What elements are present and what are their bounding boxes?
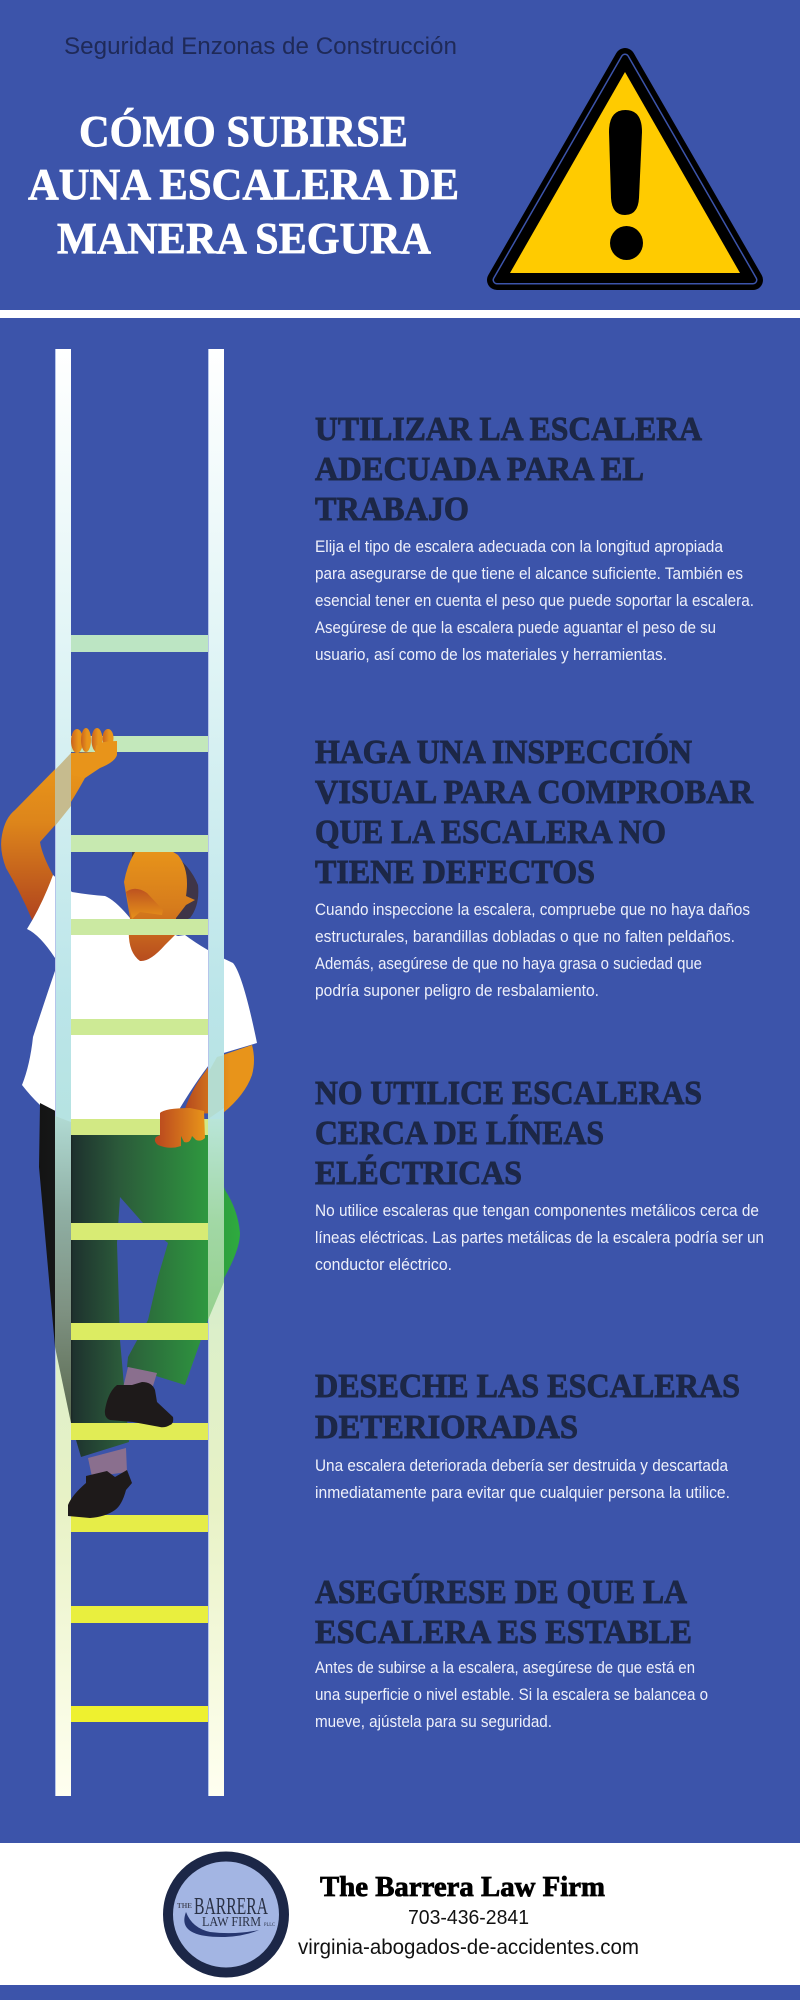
hair — [130, 852, 198, 925]
socks — [88, 1367, 157, 1477]
body text: Cuando inspeccione la escalera, compruebe que no haya daños — [315, 901, 750, 919]
heading: CERCA DE LÍNEAS — [315, 1115, 604, 1152]
heading: DESECHE LAS ESCALERAS — [315, 1368, 740, 1405]
body text: Una escalera deteriorada debería ser destruida y descartada — [315, 1457, 729, 1475]
section 1: right ladder — [315, 411, 754, 664]
heading — [315, 733, 753, 891]
heading: ADECUADA PARA EL — [315, 451, 644, 488]
heading: UTILIZAR LA ESCALERA — [315, 411, 702, 448]
heading: DETERIORADAS — [315, 1409, 578, 1446]
logo: BARRERA — [194, 1894, 268, 1920]
body text: mueve, ajústela para su seguridad. — [315, 1713, 552, 1731]
rungs — [71, 635, 208, 652]
body text: inmediatamente para evitar que cualquier persona la utilice. — [315, 1484, 730, 1502]
section 2: visual inspection — [315, 733, 753, 1000]
heading — [315, 1368, 740, 1446]
heading: TRABAJO — [315, 491, 469, 528]
ladder — [55, 349, 224, 1796]
icon: fist gripping rung — [71, 728, 117, 778]
body text: esencial tener en cuenta el peso que puede soportar la escalera. — [315, 592, 754, 610]
section 5: stable ladder — [315, 1573, 708, 1731]
body text: podría suponer peligro de resbalamiento. — [315, 982, 599, 1000]
body text: líneas eléctricas. Las partes metálicas de la escalera podría ser un — [315, 1229, 764, 1247]
heading: QUE LA ESCALERA NO — [315, 814, 666, 851]
title: AUNA ESCALERA DE — [28, 160, 459, 209]
arm seen through rail — [55, 753, 71, 826]
heading — [315, 1573, 692, 1651]
body text: estructurales, barandillas dobladas o que no falten peldaños. — [315, 928, 735, 946]
heading: NO UTILICE ESCALERAS — [315, 1075, 702, 1112]
body text — [315, 538, 754, 664]
logo: PLLC — [264, 1923, 276, 1928]
title: CÓMO SUBIRSE — [79, 107, 408, 156]
heading: HAGA UNA INSPECCIÓN — [315, 733, 692, 771]
leg seen through left rail — [55, 1116, 71, 1423]
body text: usuario, así como de los materiales y herramientas. — [315, 646, 667, 664]
body text: Asegúrese de que la escalera puede aguantar el peso de su — [315, 619, 716, 637]
section 4: discard damaged ladders — [315, 1368, 740, 1502]
icon: back shoe — [68, 1470, 132, 1518]
forearm — [183, 1045, 254, 1114]
heading: ASEGÚRESE DE QUE LA — [315, 1573, 687, 1611]
raised arm — [1, 753, 113, 922]
header divider — [0, 310, 800, 318]
body text: No utilice escaleras que tengan componentes metálicos cerca de — [315, 1202, 759, 1220]
leg seen through right rail — [208, 1119, 224, 1320]
firm name: The Barrera Law Firm — [320, 1871, 605, 1903]
figure: climbing man behind ladder — [1, 753, 257, 1477]
forearm seen through right rail — [208, 1055, 224, 1119]
logo — [168, 1856, 284, 1972]
body text: una superficie o nivel estable. Si la escalera se balancea o — [315, 1686, 708, 1704]
phone number: 703-436-2841 — [408, 1906, 529, 1929]
logo: LAW FIRM — [202, 1914, 261, 1929]
website: virginia-abogados-de-accidentes.com — [298, 1936, 639, 1959]
head and neck — [124, 850, 195, 961]
icon: front shoe — [105, 1382, 173, 1427]
heading: ESCALERA ES ESTABLE — [315, 1614, 692, 1651]
body text: conductor eléctrico. — [315, 1256, 452, 1274]
body text: Además, asegúrese de que no haya grasa o suciedad que — [315, 955, 702, 973]
subtitle: Seguridad Enzonas de Construcción — [64, 33, 457, 60]
trousers — [39, 1103, 240, 1457]
body text — [315, 1202, 764, 1274]
body text: para asegurarse de que tiene el alcance suficiente. También es — [315, 565, 743, 583]
body text — [315, 901, 750, 1000]
section 3: power lines — [315, 1075, 764, 1274]
footer panel — [0, 1843, 800, 1985]
heading: VISUAL PARA COMPROBAR — [315, 774, 753, 811]
body text — [315, 1457, 730, 1502]
title — [28, 107, 459, 263]
body text — [315, 1659, 708, 1731]
heading — [315, 1075, 702, 1192]
logo: THE — [177, 1902, 192, 1910]
body text: Elija el tipo de escalera adecuada con la longitud apropiada — [315, 538, 724, 556]
heading: ELÉCTRICAS — [315, 1155, 522, 1192]
heading — [315, 411, 702, 528]
icon: warning triangle — [497, 58, 753, 280]
body text: Antes de subirse a la escalera, asegúrese de que está en — [315, 1659, 695, 1677]
face shadow — [126, 889, 163, 919]
rails — [55, 349, 71, 1796]
shirt — [22, 875, 257, 1119]
heading: TIENE DEFECTOS — [315, 854, 595, 891]
title: MANERA SEGURA — [57, 214, 431, 263]
icon: hand on rung — [155, 1108, 205, 1148]
